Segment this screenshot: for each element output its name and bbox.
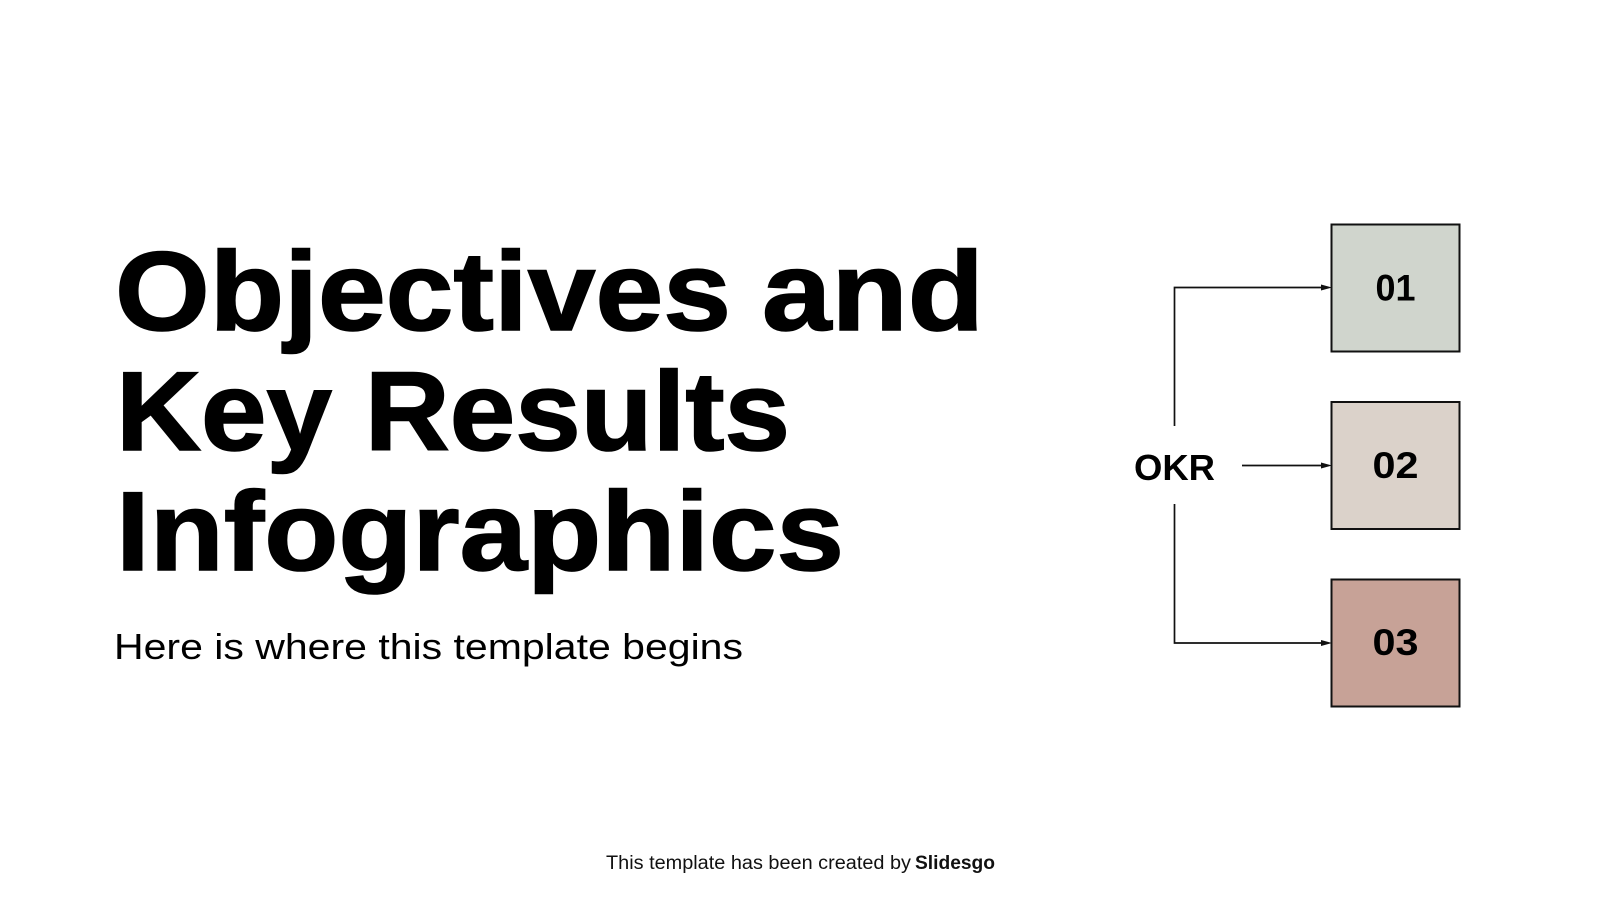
subtitle: Here is where this template begins bbox=[114, 626, 743, 667]
title line 3: Infographics bbox=[116, 469, 844, 594]
title bbox=[115, 229, 984, 594]
OKR diagram bbox=[1134, 224, 1460, 706]
title line 1: and bbox=[762, 229, 984, 354]
arrow to box 01 bbox=[1174, 284, 1332, 426]
title line 1 bbox=[115, 229, 984, 354]
box 01: 01 bbox=[1376, 268, 1416, 308]
arrow to box 02 bbox=[1242, 462, 1332, 468]
box 01 bbox=[1332, 224, 1460, 352]
box 03 bbox=[1332, 580, 1460, 706]
arrow to box 03 bbox=[1174, 504, 1332, 646]
title line 1: Objectives bbox=[115, 229, 731, 354]
title line 2: Key Results bbox=[116, 349, 790, 474]
OKR label: OKR bbox=[1134, 447, 1215, 488]
footer credit: Slidesgo bbox=[915, 853, 995, 874]
footer credit: This template has been created by bbox=[606, 853, 912, 874]
box 03: 03 bbox=[1372, 622, 1418, 663]
box 02 bbox=[1332, 402, 1460, 529]
box 02: 02 bbox=[1372, 445, 1418, 486]
